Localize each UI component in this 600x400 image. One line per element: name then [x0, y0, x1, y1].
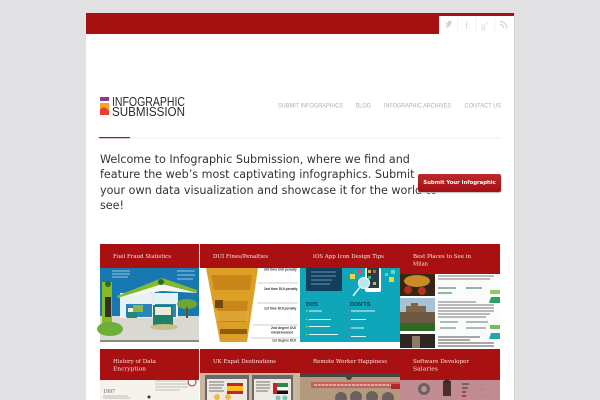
icon: Spain flag — [227, 383, 243, 394]
icon: UAE flag — [273, 383, 288, 394]
card header — [400, 349, 500, 380]
card: History of Data Encryption: 1997 — [103, 389, 115, 395]
card header: UK Expat Destinations — [213, 359, 276, 365]
card: DUI Fines/Penalties: 2nd degree DUI — [271, 326, 296, 330]
card: Best Places to See in Milan — [400, 244, 500, 348]
intro text: Welcome to Infographic Submission, where we find and — [100, 152, 410, 166]
card header: Fuel Fraud Statistics — [113, 254, 171, 260]
card header: Salaries — [413, 366, 438, 372]
card: Remote Worker Happiness — [300, 349, 400, 400]
card header: iOS App Icon Design Tips — [313, 254, 384, 260]
card header: DUI Fines/Penalties — [213, 254, 268, 260]
card header: History of Data — [113, 359, 157, 365]
card: Fuel Fraud Statistics — [97, 244, 199, 342]
navigation: INFOGRAPHIC ARCHIVES — [384, 102, 451, 110]
intro text — [100, 152, 437, 212]
card: iOS App Icon Design Tips — [300, 244, 400, 342]
intro text: your own data visualization and showcase it for the world to — [100, 184, 437, 197]
card header — [400, 244, 500, 274]
icon: google plus: + — [486, 22, 490, 28]
card: DUI Fines/Penalties: misdemeanor — [271, 330, 294, 334]
card header — [100, 349, 199, 380]
card: UK Expat Destinations — [200, 349, 300, 400]
card: DUI Fines/Penalties: 1st degree DUI — [272, 338, 296, 342]
card: History of Data Encryption — [100, 349, 199, 400]
submit button — [418, 174, 501, 192]
card header: Milan — [413, 262, 428, 268]
card header: Encryption — [113, 366, 146, 372]
card: iOS App Icon Design Tips: DOS — [306, 302, 318, 308]
navigation: BLOG — [356, 102, 371, 110]
page panel — [86, 13, 514, 400]
icon: twitter — [446, 21, 452, 28]
card: DUI Fines/Penalties: 2nd time DUI penalty — [264, 287, 298, 291]
header rule — [99, 137, 501, 138]
intro text: feature the web’s most captivating infographics. Submit — [100, 168, 415, 181]
logo wordmark: INFOGRAPHIC — [112, 94, 185, 109]
navigation — [278, 102, 501, 110]
logo mark — [100, 97, 109, 115]
social icons — [446, 16, 507, 34]
intro text: see! — [100, 199, 124, 212]
card: DUI Fines/Penalties — [200, 244, 300, 342]
submit button: Submit Your Infographic — [423, 180, 496, 186]
card: Software Developer Salaries — [400, 349, 500, 400]
card header: Best Places to See in — [413, 254, 471, 260]
card: DUI Fines/Penalties: 3rd time DUI penalty — [264, 268, 297, 272]
icon: rss — [500, 22, 507, 28]
logo — [100, 94, 185, 119]
card: DUI Fines/Penalties: 1st time DUI penalty — [264, 306, 297, 310]
icon: facebook: f — [465, 21, 469, 32]
card header: Remote Worker Happiness — [313, 359, 387, 365]
navigation: SUBMIT INFOGRAPHICS — [278, 102, 343, 110]
logo wordmark — [112, 94, 185, 119]
icon: google plus: g — [481, 21, 486, 31]
card header: Software Developer — [413, 359, 469, 365]
navigation: CONTACT US — [464, 102, 501, 110]
top red bar — [86, 13, 514, 34]
card: iOS App Icon Design Tips: DON'TS — [350, 302, 371, 308]
logo wordmark: SUBMISSION — [112, 104, 185, 119]
